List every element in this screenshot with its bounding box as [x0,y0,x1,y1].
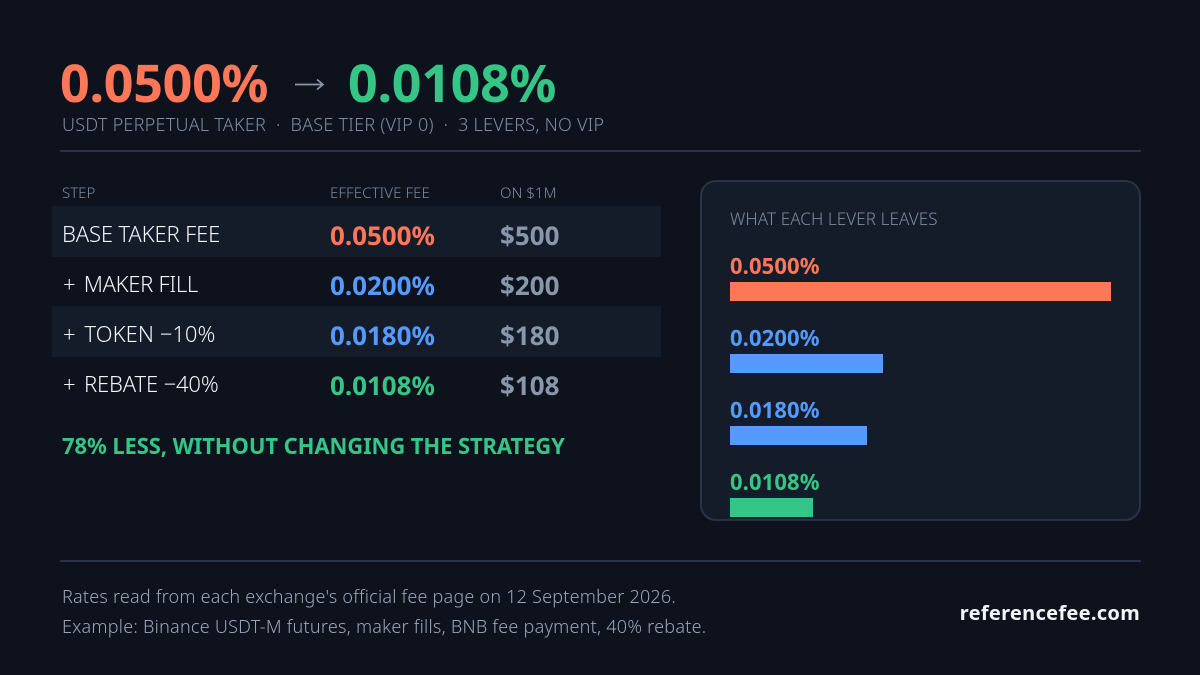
final fee: 0.0108% [348,47,556,118]
bar 4 value: 0.0108% [730,467,820,497]
chart heading: WHAT EACH LEVER LEAVES [730,207,938,230]
row 2 cost: $200 [500,267,560,303]
row 3 label: + TOKEN −10% [63,319,215,349]
bar 1 fill [730,282,1111,301]
row 3 cost: $180 [500,317,560,353]
column header: step: STEP [62,183,95,203]
subtitle: USDT PERPETUAL TAKER · BASE TIER (VIP 0) · 3 LEVERS, NO VIP [62,113,604,137]
brand: referencefee.com [960,599,1140,626]
row band 3 [52,306,661,357]
row 1 fee: 0.0500% [330,217,435,253]
bar 3 [730,395,867,445]
row band 1 [52,206,661,257]
bar 4 [730,467,820,517]
bar 3 fill [730,426,867,445]
bar 2 value: 0.0200% [730,323,820,353]
bar 4 fill [730,498,813,517]
bar 2 fill [730,354,883,373]
footnote: Example: Binance USDT-M futures, maker fills, BNB fee payment, 40% rebate. [62,615,706,639]
row 4 label: + REBATE −40% [63,369,219,399]
row 2 label: + MAKER FILL [63,269,198,299]
bar 2 [730,323,883,373]
row 2 fee: 0.0200% [330,267,435,303]
footnote: Rates read from each exchange's official fee page on 12 September 2026. [62,585,676,609]
row 4 cost: $108 [500,367,560,403]
footnote [62,585,706,639]
bar 1 [730,251,1111,301]
bar 3 value: 0.0180% [730,395,820,425]
row 4 fee: 0.0108% [330,367,435,403]
column header: on $1M: ON $1M [500,183,557,203]
callout: 78% less: 78% LESS, WITHOUT CHANGING THE STRATEGY [62,431,565,461]
row 1 cost: $500 [500,217,560,253]
panel: bar chart [700,180,1141,521]
bar 1 value: 0.0500% [730,251,820,281]
row 3 fee: 0.0180% [330,317,435,353]
starting fee: 0.0500% [60,47,268,118]
table: fee steps [52,183,661,403]
icon: arrow [295,78,324,90]
row 1 label: BASE TAKER FEE [62,219,220,249]
column header: effective fee: EFFECTIVE FEE [330,183,430,203]
title: fee reduction [60,47,556,118]
